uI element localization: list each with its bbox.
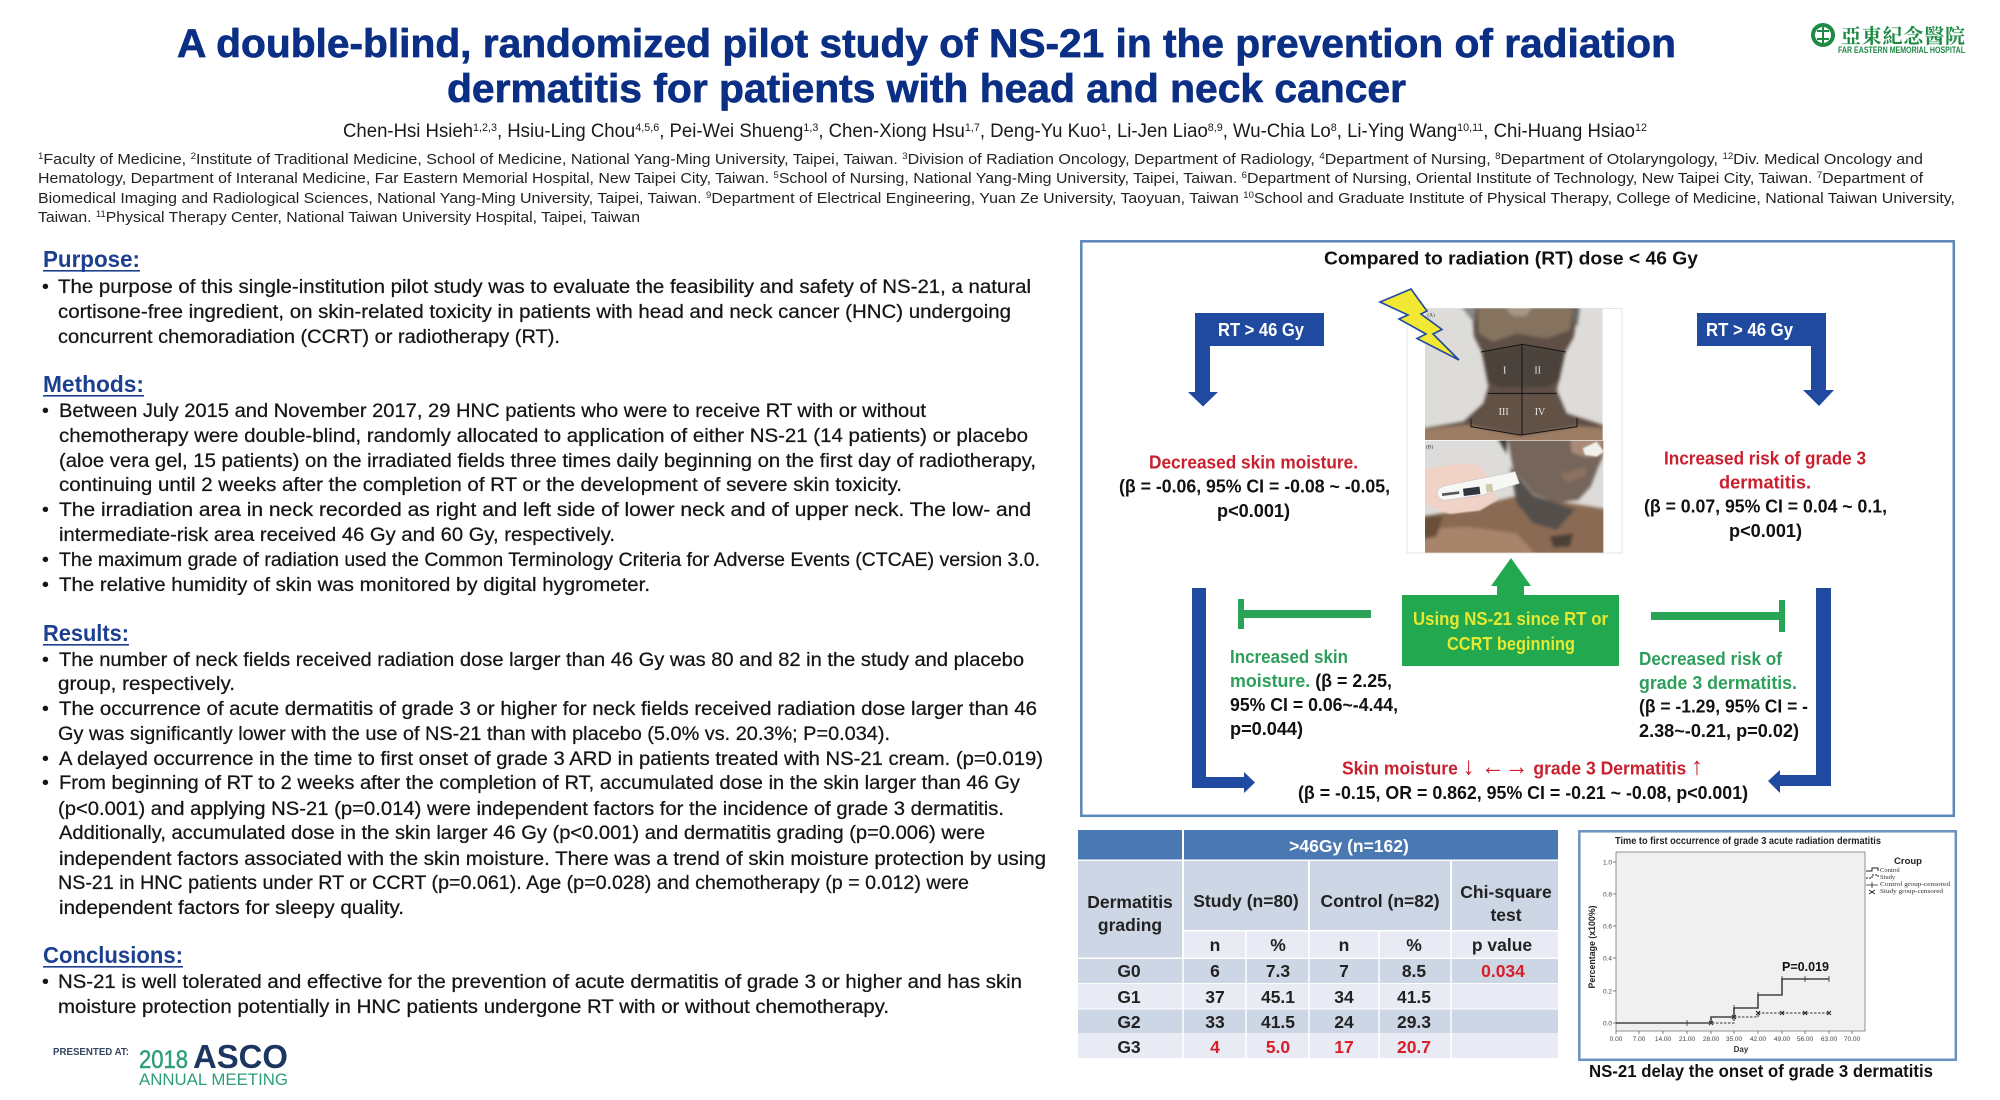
results text: (p<0.001) and applying NS-21 (p=0.014) were independent factors for the incidence of grade 3 dermatitis.: [58, 798, 1004, 820]
affiliations: 5: [773, 170, 779, 180]
table: dermatitis grading: 6: [1210, 961, 1220, 981]
affiliations: Department of Nursing,: [1325, 151, 1495, 168]
axes ticks and labels: 0.6: [1603, 924, 1612, 930]
axes ticks and labels: 0.8: [1603, 892, 1612, 898]
methods text: •: [42, 400, 49, 422]
methods text: [42, 400, 1040, 596]
axes ticks and labels: 7.00: [1633, 1036, 1646, 1043]
table: dermatitis grading: 7.3: [1266, 961, 1290, 981]
panel: results: [42, 620, 1046, 919]
methods text: •: [42, 574, 49, 596]
affiliations: 9: [706, 190, 711, 200]
plot area: [1616, 852, 1865, 1031]
icon: lightning bolt: [1380, 289, 1459, 360]
icon: hospital emblem: [1813, 25, 1833, 45]
methods text: The irradiation area in neck recorded as right and left side of lower neck and of upper neck. The low- and: [59, 499, 1031, 521]
text: decreased skin moisture: p<0.001): [1217, 500, 1290, 521]
axes ticks and labels: 14.00: [1655, 1036, 1672, 1043]
axes ticks and labels: 49.00: [1774, 1036, 1791, 1043]
authors: 10,11: [1457, 122, 1483, 134]
axes ticks and labels: 21.00: [1679, 1036, 1696, 1043]
text: increased risk of grade 3 dermatitis: p<0.001): [1729, 520, 1802, 541]
arrow: left RT > 46 Gy: RT > 46 Gy: [1218, 319, 1305, 340]
text: decreased skin moisture: [1119, 452, 1390, 521]
text: decreased skin moisture: (β = -0.06, 95% CI = -0.08 ~ -0.05,: [1119, 476, 1390, 496]
text: skin moisture and dermatitis association: [1298, 752, 1748, 803]
axes ticks and labels: 35.00: [1726, 1036, 1743, 1043]
affiliations: Department of Electrical Engineering, Yuan Ze University, Taoyuan, Taiwan: [711, 190, 1243, 207]
axes ticks and labels: 0.4: [1603, 956, 1612, 962]
text: decreased risk of grade 3 dermatitis: (β = -1.29, 95% CI = -: [1639, 696, 1808, 716]
legend: Control: [1880, 867, 1900, 874]
heading: results: Results:: [43, 620, 129, 646]
inhibition bar: right: [1651, 600, 1785, 632]
results text: Gy was significantly lower with the use of NS-21 than with placebo (5.0% vs. 20.3%; P=0.034).: [58, 723, 890, 745]
authors: 1,2,3: [473, 122, 497, 134]
text: decreased risk of grade 3 dermatitis: grade 3 dermatitis.: [1639, 672, 1797, 693]
photo: neck fields and hygrometer: IV: [1535, 407, 1546, 418]
axes ticks and labels: 0.00: [1610, 1036, 1623, 1043]
affiliations: Biomedical Imaging and Radiological Sciences, National Yang-Ming University, Taipei, Taiwan.: [38, 190, 663, 207]
text: skin moisture and dermatitis association: Skin moisture ↓ ←→ grade 3 Dermatitis ↑: [1342, 752, 1703, 780]
text: increased risk of grade 3 dermatitis: Increased risk of grade 3: [1664, 448, 1866, 468]
affiliations: 1: [38, 151, 43, 161]
table: dermatitis grading: grading: [1098, 915, 1162, 935]
authors: , Chi-Huang Hsiao: [1483, 121, 1635, 142]
table: dermatitis grading: >46Gy (n=162): [1289, 836, 1409, 856]
purpose text: •: [42, 276, 49, 298]
NS-21 box with arrow: [1402, 558, 1619, 666]
affiliations: 12: [1722, 151, 1733, 161]
methods text: •: [42, 499, 49, 521]
table: dermatitis grading: 33: [1205, 1012, 1225, 1032]
affiliations: 10: [1243, 190, 1254, 200]
affiliations: [38, 151, 1955, 226]
methods text: continuing until 2 weeks after the completion of RT or the development of severe skin toxicity.: [59, 474, 902, 496]
text: increased risk of grade 3 dermatitis: dermatitis.: [1719, 472, 1811, 492]
p value: P=0.019: [1782, 960, 1829, 974]
conclusions text: moisture protection potentially in HNC patients undergone RT with or without chemotherapy.: [58, 996, 889, 1018]
legend: Study: [1880, 874, 1896, 881]
inhibition bar: left: [1238, 599, 1371, 629]
results text: NS-21 in HNC patients under RT or CCRT (p=0.061). Age (p=0.028) and chemotherapy (p = 0.012) were: [58, 872, 969, 894]
axes ticks and labels: 56.00: [1797, 1036, 1814, 1043]
table: dermatitis grading: %: [1406, 935, 1422, 955]
authors: , Deng-Yu Kuo: [980, 121, 1101, 142]
affiliations: Department of: [1822, 170, 1924, 187]
legend: Croup: [1894, 856, 1922, 867]
methods text: chemotherapy were double-blind, randomly allocated to application of either NS-21 (14 patients) or placebo: [59, 425, 1028, 447]
affiliations: Division of Radiation Oncology, Department of Radiology,: [908, 151, 1319, 168]
conclusions text: [42, 971, 1022, 1018]
authors: , Chen-Xiong Hsu: [818, 121, 965, 142]
title: dermatitis for patients with head and neck cancer: [447, 67, 1406, 111]
authors: , Li-Ying Wang: [1337, 121, 1457, 142]
authors: , Hsiu-Ling Chou: [497, 121, 635, 142]
results text: •: [42, 748, 49, 770]
text: increased risk of grade 3 dermatitis: (β = 0.07, 95% CI = 0.04 ~ 0.1,: [1644, 496, 1887, 516]
affiliations: 4: [1319, 151, 1325, 161]
photo: neck fields and hygrometer: III: [1499, 407, 1509, 418]
axes ticks and labels: 0.0: [1603, 1020, 1612, 1028]
results text: A delayed occurrence in the time to first onset of grade 3 ARD in patients treated with NS-21 cream. (p=0.019): [59, 748, 1043, 770]
table: dermatitis grading: 29.3: [1397, 1012, 1431, 1032]
photo: neck fields and hygrometer: (A): [1427, 312, 1435, 319]
title: [177, 22, 1676, 111]
table: dermatitis grading: p value: [1472, 935, 1532, 955]
table: dermatitis grading: 4: [1210, 1037, 1220, 1057]
table: dermatitis grading: 0.034: [1481, 961, 1525, 981]
chart caption: NS-21 delay the onset of grade 3 dermatitis: [1589, 1061, 1933, 1081]
authors: 1,7: [965, 122, 980, 134]
text: increased skin moisture: 95% CI = 0.06~-4.44,: [1230, 694, 1398, 715]
affiliations: Taiwan.: [38, 209, 89, 226]
results text: From beginning of RT to 2 weeks after the completion of RT, accumulated dose in the skin larger than 46 Gy: [59, 772, 1020, 794]
photo: neck fields and hygrometer: (B): [1426, 443, 1433, 450]
authors: 8,9: [1208, 122, 1223, 134]
text: decreased risk of grade 3 dermatitis: Decreased risk of: [1639, 648, 1783, 669]
panel: mechanism diagram: [1081, 241, 1954, 816]
purpose text: cortisone-free ingredient, on skin-related toxicity in patients with head and neck cancer (HNC) undergoing: [58, 301, 1011, 323]
heading: purpose: Purpose:: [43, 246, 140, 272]
table: dermatitis grading: 41.5: [1397, 987, 1431, 1007]
logo: ASCO annual meeting: [53, 1038, 288, 1089]
methods text: intermediate-risk area received 46 Gy and 60 Gy, respectively.: [59, 524, 615, 546]
results text: •: [42, 698, 49, 720]
NS-21 box with arrow: Using NS-21 since RT or: [1413, 608, 1608, 629]
axes ticks and labels: 0.2: [1603, 988, 1612, 996]
table: dermatitis grading: 7: [1339, 961, 1349, 981]
arrow: right RT > 46 Gy: RT > 46 Gy: [1706, 319, 1794, 340]
arrow: right RT > 46 Gy: [1697, 313, 1834, 406]
results text: •: [42, 649, 49, 671]
table: dermatitis grading: G3: [1117, 1037, 1141, 1057]
results text: The number of neck fields received radiation dose larger than 46 Gy was 80 and 82 in the study and placebo: [59, 649, 1024, 671]
methods text: The maximum grade of radiation used the Common Terminology Criteria for Adverse Events (CTCAE) version 3.0.: [59, 549, 1040, 571]
authors: 4,5,6: [635, 122, 659, 134]
affiliations: 3: [902, 151, 908, 161]
arrow: left elbow: [1192, 588, 1255, 793]
table: dermatitis grading: Control (n=82): [1320, 891, 1440, 911]
logo: Far Eastern Memorial Hospital: 亞東紀念醫院: [1841, 20, 1965, 49]
logo: ASCO annual meeting: ANNUAL MEETING: [139, 1070, 288, 1089]
axes ticks and labels: [1587, 860, 1861, 1054]
results text: group, respectively.: [58, 673, 235, 695]
affiliations: 8: [1495, 151, 1501, 161]
conclusions text: •: [42, 971, 49, 993]
results text: independent factors associated with the skin moisture. There was a trend of skin moisture protection by using: [59, 848, 1046, 870]
methods text: Between July 2015 and November 2017, 29 HNC patients who were to receive RT with or without: [59, 400, 927, 422]
affiliations: Department of Otolaryngology,: [1501, 151, 1722, 168]
affiliations: Hematology, Department of Interanal Medicine, Far Eastern Memorial Hospital, New Taipei City, Taiwan.: [38, 170, 727, 187]
axes ticks and labels: 42.00: [1750, 1036, 1767, 1043]
legend: Control group-censored: [1880, 881, 1951, 888]
table: dermatitis grading: Dermatitis: [1087, 892, 1173, 912]
table: dermatitis grading: 41.5: [1261, 1012, 1295, 1032]
axes ticks and labels: 70.00: [1844, 1036, 1861, 1043]
table: dermatitis grading: 45.1: [1261, 987, 1295, 1007]
table: dermatitis grading: [1078, 830, 1558, 1058]
legend: [1866, 856, 1951, 895]
affiliations: Div. Medical Oncology and: [1733, 151, 1923, 168]
methods text: The relative humidity of skin was monitored by digital hygrometer.: [59, 574, 650, 596]
affiliations: 7: [1817, 170, 1822, 180]
affiliations: School and Graduate Institute of Physical Therapy, College of Medicine, National Taiwan University,: [1254, 190, 1955, 207]
table: dermatitis grading: 8.5: [1402, 961, 1426, 981]
heading: methods: Methods:: [43, 371, 144, 397]
affiliations: Department of Nursing, Oriental Institute of Technology, New Taipei City, Taiwan.: [1247, 170, 1817, 187]
authors: 12: [1635, 122, 1647, 134]
text: increased skin moisture: moisture. (β = 2.25,: [1230, 670, 1392, 691]
axes ticks and labels: 28.00: [1703, 1036, 1720, 1043]
results text: Additionally, accumulated dose in the skin larger 46 Gy (p<0.001) and dermatitis grading (p=0.006) were: [59, 822, 985, 844]
panel: methods: [42, 371, 1040, 596]
text: skin moisture and dermatitis association: (β = -0.15, OR = 0.862, 95% CI = -0.21 ~ -0.08, p<0.001): [1298, 782, 1748, 803]
authors: 1,3: [803, 122, 818, 134]
purpose text: The purpose of this single-institution pilot study was to evaluate the feasibility and safety of NS-21, a natural: [58, 276, 1031, 298]
text: decreased skin moisture: Decreased skin moisture.: [1149, 452, 1358, 472]
authors: , Li-Jen Liao: [1107, 121, 1208, 142]
axes ticks and labels: 63.00: [1821, 1036, 1838, 1043]
table: dermatitis grading: n: [1339, 935, 1349, 955]
diagram heading: Compared to radiation (RT) dose < 46 Gy: [1324, 248, 1699, 268]
table: dermatitis grading: G1: [1117, 987, 1141, 1007]
chart title: Time to first occurrence of grade 3 acute radiation dermatitis: [1615, 836, 1881, 847]
conclusions text: NS-21 is well tolerated and effective for the prevention of acute dermatitis of grade 3 or higher and has skin: [58, 971, 1022, 993]
table: dermatitis grading: 5.0: [1266, 1037, 1290, 1057]
text: increased risk of grade 3 dermatitis: [1644, 448, 1887, 541]
results text: The occurrence of acute dermatitis of grade 3 or higher for neck fields received radiation dose larger than 46: [59, 698, 1037, 720]
axes ticks and labels: Percentage (x100%): [1587, 906, 1598, 988]
text: increased skin moisture: Increased skin: [1230, 646, 1348, 667]
authors: 1: [1101, 122, 1107, 134]
control curve: [1616, 976, 1829, 1026]
text: increased skin moisture: [1230, 646, 1398, 739]
authors: Chen-Hsi Hsieh: [343, 121, 476, 142]
authors: 8: [1331, 122, 1337, 134]
table: dermatitis grading: G2: [1117, 1012, 1141, 1032]
affiliations: 2: [191, 151, 196, 161]
table: dermatitis grading: test: [1490, 905, 1522, 925]
arrow: right elbow: [1768, 588, 1831, 793]
panel: conclusions: [42, 942, 1022, 1018]
results text: independent factors for sleepy quality.: [59, 897, 404, 919]
affiliations: Faculty of Medicine,: [43, 151, 191, 168]
methods text: •: [42, 549, 49, 571]
table: dermatitis grading: G0: [1117, 961, 1141, 981]
results text: •: [42, 772, 49, 794]
table: dermatitis grading: %: [1270, 935, 1286, 955]
table: dermatitis grading: 34: [1334, 987, 1354, 1007]
axes ticks and labels: Day: [1734, 1045, 1749, 1054]
logo: Far Eastern Memorial Hospital: [1813, 20, 1965, 56]
NS-21 box with arrow: CCRT beginning: [1447, 633, 1575, 654]
text: increased skin moisture: p=0.044): [1230, 718, 1303, 739]
affiliations: 11: [96, 209, 106, 219]
photo: neck fields and hygrometer: II: [1534, 365, 1541, 376]
purpose text: [42, 276, 1031, 348]
logo: ASCO annual meeting: 2018: [139, 1046, 188, 1074]
heading: conclusions: Conclusions:: [43, 942, 183, 968]
arrow: left RT > 46 Gy: [1188, 313, 1324, 406]
table: dermatitis grading: 24: [1334, 1012, 1354, 1032]
logo: ASCO annual meeting: PRESENTED AT:: [53, 1047, 129, 1058]
table: dermatitis grading: 17: [1334, 1037, 1354, 1057]
logo: ASCO annual meeting: ASCO: [193, 1038, 288, 1075]
panel: purpose: [42, 246, 1031, 348]
authors: , Pei-Wei Shueng: [659, 121, 803, 142]
text: decreased risk of grade 3 dermatitis: 2.38~-0.21, p=0.02): [1639, 720, 1799, 741]
photo: neck fields and hygrometer: [1407, 300, 1622, 563]
text: decreased risk of grade 3 dermatitis: [1639, 648, 1808, 741]
title: A double-blind, randomized pilot study of NS-21 in the prevention of radiation: [177, 22, 1676, 66]
affiliations: Physical Therapy Center, National Taiwan University Hospital, Taipei, Taiwan: [106, 209, 640, 226]
affiliations: 6: [1242, 170, 1247, 180]
legend: Study group-censored: [1880, 888, 1944, 895]
table: dermatitis grading: Chi-square: [1460, 882, 1552, 902]
affiliations: School of Nursing, National Yang-Ming University, Taipei, Taiwan.: [779, 170, 1242, 187]
table: dermatitis grading: Study (n=80): [1193, 891, 1299, 911]
results text: [42, 649, 1046, 919]
photo: neck fields and hygrometer: I: [1503, 365, 1506, 376]
authors: , Wu-Chia Lo: [1223, 121, 1331, 142]
purpose text: concurrent chemoradiation (CCRT) or radiotherapy (RT).: [58, 326, 560, 348]
study curve: [1616, 1011, 1831, 1025]
affiliations: Institute of Traditional Medicine, School of Medicine, National Yang-Ming University, Taipei, Taiwan.: [196, 151, 902, 168]
table: dermatitis grading: n: [1210, 935, 1220, 955]
chart: time to first occurrence: [1579, 831, 1956, 1060]
axes ticks and labels: 1.0: [1603, 860, 1612, 866]
table: dermatitis grading: 37: [1205, 987, 1225, 1007]
methods text: (aloe vera gel, 15 patients) on the irradiated fields three times daily beginning on the first day of radiotherapy,: [59, 450, 1036, 472]
table: dermatitis grading: 20.7: [1397, 1037, 1431, 1057]
